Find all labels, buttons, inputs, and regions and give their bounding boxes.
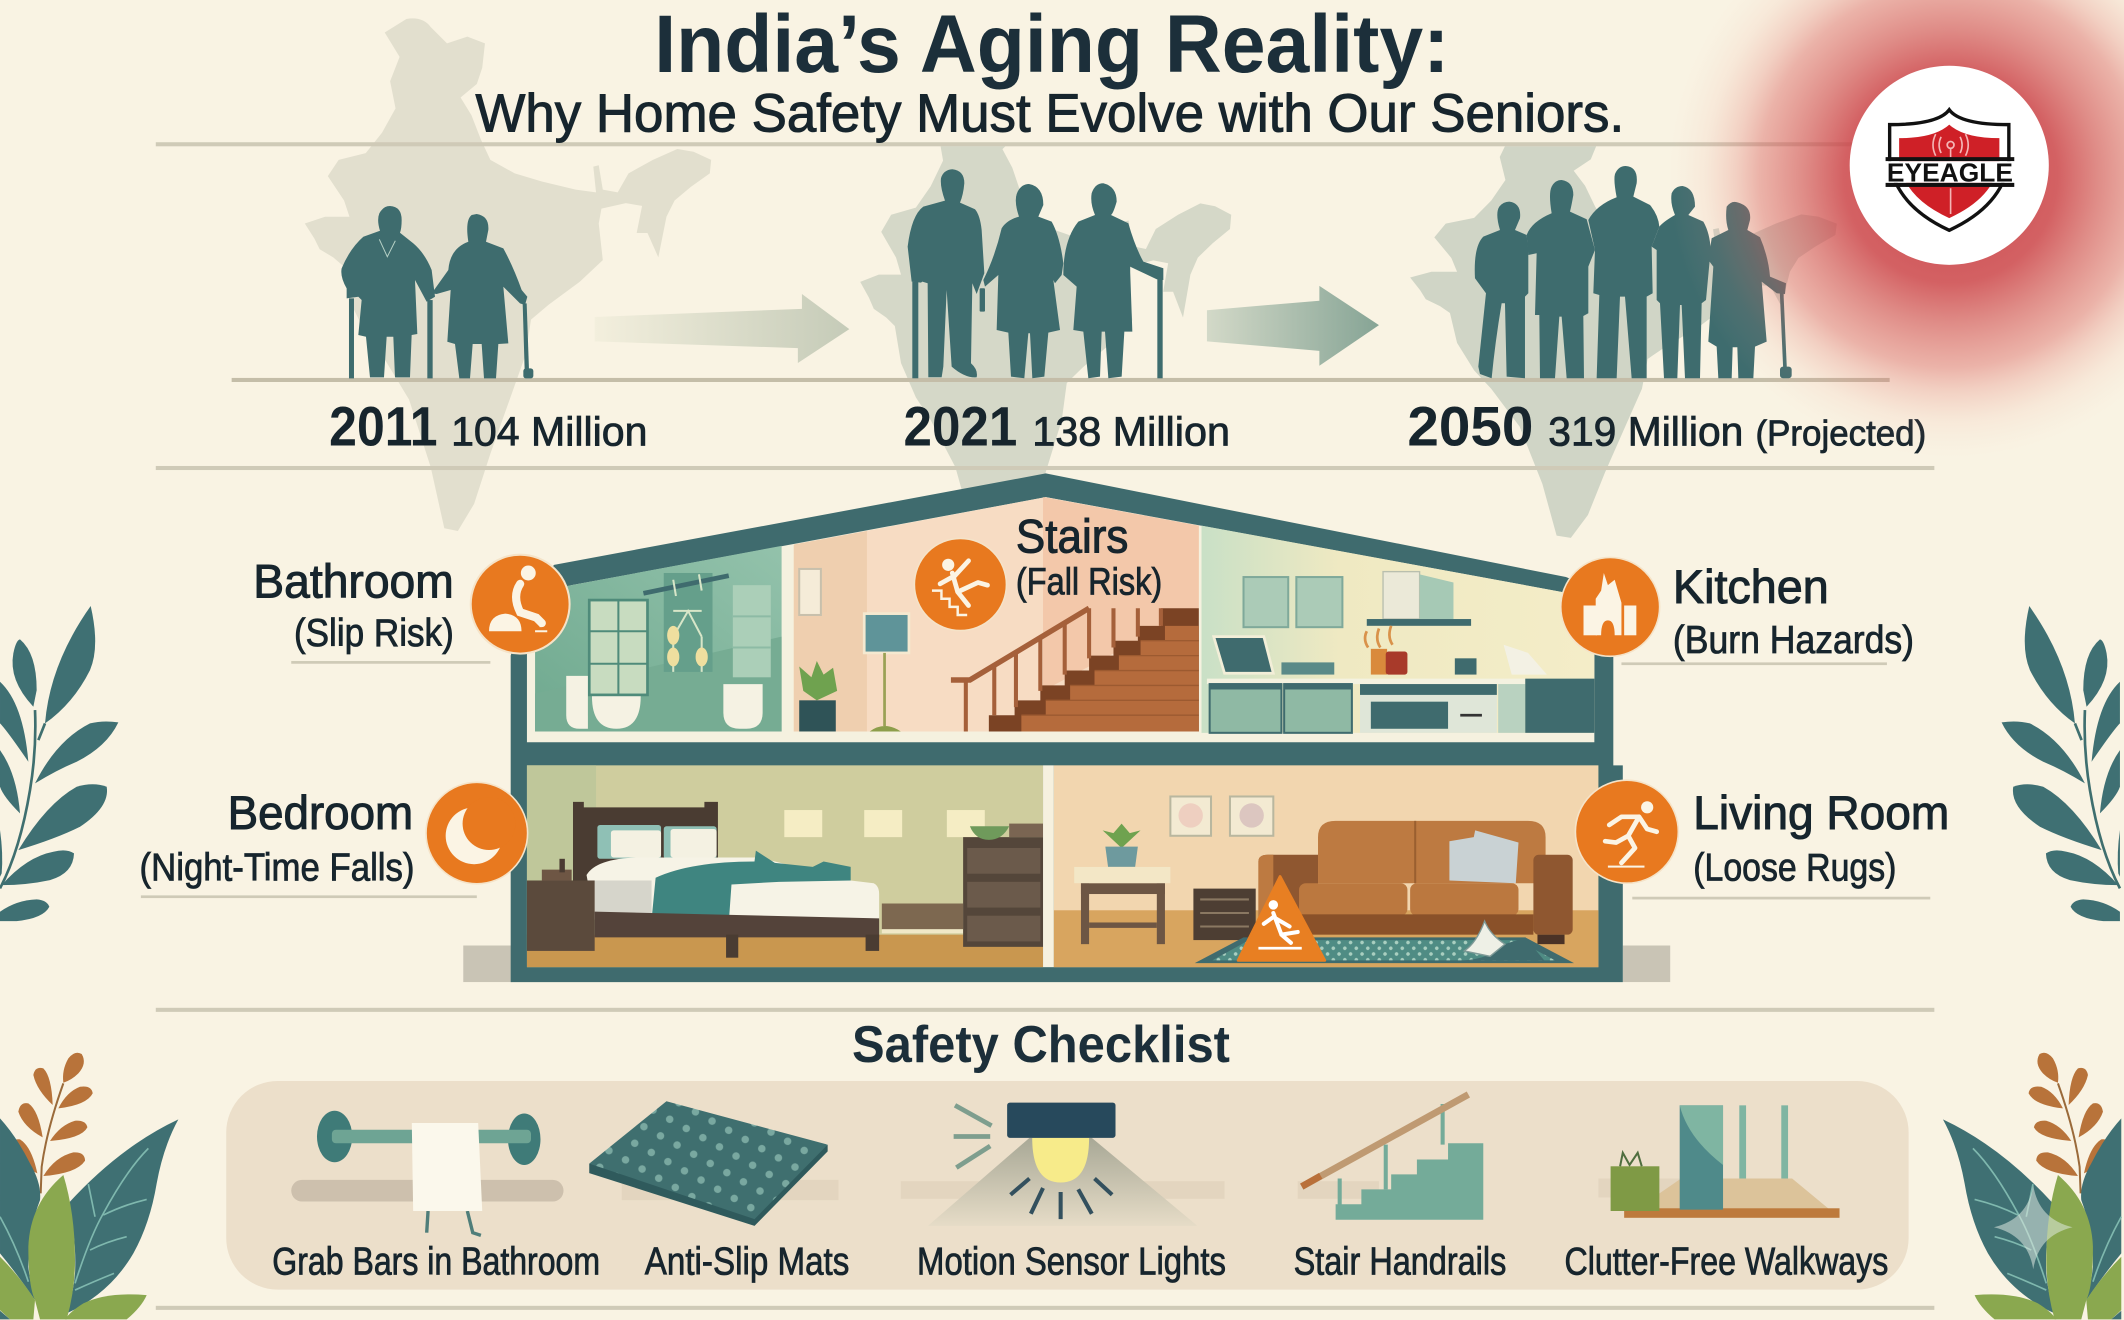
foliage: bottom right plant [1943,1053,2121,1319]
floor lamp [864,614,909,731]
red glow behind logo [1669,0,2124,458]
house [511,473,1623,982]
room: kitchen [1202,526,1594,733]
bed [573,802,879,958]
label: 2021: 138 Million [1032,409,1230,455]
label: living room [1632,787,1949,899]
label: bathroom [253,555,490,664]
arrow: 2021 to 2050 [1207,286,1379,366]
panel: safety checklist [226,1081,1909,1290]
icon: clutter-free walkway [1598,1105,1840,1218]
icon: anti-slip mat [589,1101,838,1226]
foliage: bottom left plant [0,1053,178,1319]
label: bedroom [140,787,477,898]
label: stairs: (Fall Risk) [1016,562,1162,604]
nightstand [527,859,595,951]
label: stairs: Stairs [1016,511,1128,564]
label: bathroom: (Slip Risk) [294,611,454,655]
map: India watermark 2011 [305,18,711,531]
side table [1074,867,1170,944]
label: bedroom: Bedroom [228,787,413,840]
map: India watermark 2021 [860,146,1232,489]
arrow: 2011 to 2021 [595,294,849,363]
label: lights: Motion Sensor Lights [917,1240,1226,1284]
label: 2021: 2021 [904,396,1017,458]
map: India watermark 2050 [1410,104,1837,538]
staircase [951,608,1199,731]
dresser [963,824,1043,947]
icon: sparkle watermark [1994,1185,2073,1269]
label: stairs [1016,511,1162,604]
foliage: right upper branch [2002,606,2120,921]
label: kitchen: Kitchen [1673,561,1829,614]
room: bedroom [527,765,1043,967]
label: 2050: (Projected) [1756,413,1926,454]
upper floor backing [527,497,1594,742]
icon: motion sensor light [901,1103,1225,1226]
icon: stair handrail [1298,1095,1483,1220]
potted plant [1103,824,1141,867]
plant [799,661,837,731]
room: hall and stairs [794,497,1199,731]
label: walkways: Clutter-Free Walkways [1565,1240,1888,1284]
label: kitchen: (Burn Hazards) [1673,618,1914,662]
title: India’s Aging Reality: [654,0,1449,90]
label: living room: Living Room [1693,787,1949,840]
icon: living room trip [1575,780,1678,883]
label: 2050: 319 Million [1548,409,1743,455]
label: mats: Anti-Slip Mats [645,1240,849,1284]
foliage: left upper branch [0,606,118,921]
label: 2011 [329,396,647,458]
label: living room: (Loose Rugs) [1693,845,1896,889]
logo: Eyeagle badge: EYEAGLE [1887,160,2013,188]
house structure [511,473,1623,982]
sofa [1258,821,1573,944]
subtitle: Why Home Safety Must Evolve with Our Seniors. [475,83,1624,143]
icon: stairs fall risk [914,538,1006,631]
icon: bathroom slip risk [471,555,570,654]
label: bedroom: (Night-Time Falls) [140,845,415,889]
logo: Eyeagle badge [1850,66,2049,265]
wet floor cone [1238,876,1325,960]
room: bathroom [535,546,782,731]
heading: safety checklist: Safety Checklist [852,1015,1230,1073]
figures: 2011 two seniors [341,206,533,378]
icon: bedroom moon [426,782,528,884]
label: kitchen [1621,561,1914,665]
room: living room [1054,765,1598,967]
label: 2050: 2050 [1407,396,1533,458]
label: bathroom: Bathroom [253,555,454,608]
label: 2011: 104 Million [451,409,647,455]
label: handrails: Stair Handrails [1294,1240,1506,1284]
label: grab bars: Grab Bars in Bathroom [272,1240,600,1284]
label: 2050 [1407,396,1926,458]
label: 2011: 2011 [329,396,438,458]
ground slabs under house [463,945,1670,982]
icon: grab bar [291,1111,564,1235]
label: 2021 [904,396,1230,458]
icon: kitchen burn hazard [1561,557,1660,656]
rug with curled corner [1195,921,1574,963]
low shelf [1193,889,1256,940]
figures: 2050 five seniors [1475,166,1792,378]
figures: 2021 three seniors [908,169,1163,378]
